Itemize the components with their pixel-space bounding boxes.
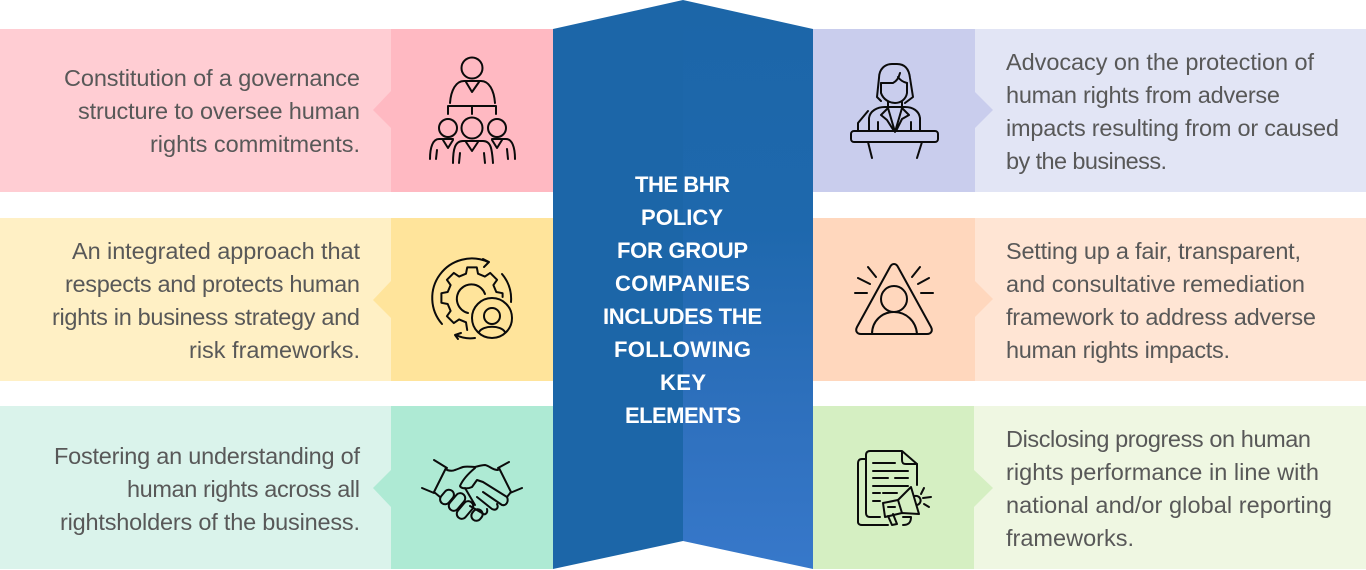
text: integrated approach: [52, 238, 360, 363]
banner heading: INCLUDES THE: [603, 304, 762, 329]
text: advocacy: human rights from adverse: [1006, 82, 1280, 108]
text: fostering understanding: Fostering an understanding of: [54, 443, 360, 469]
panel: governance structure: [0, 29, 553, 192]
banner heading: ELEMENTS: [625, 403, 741, 428]
text: advocacy: impacts resulting from or caused: [1006, 115, 1339, 141]
panel: advocacy: [813, 29, 1366, 192]
banner heading: FOR GROUP: [617, 238, 748, 263]
panel: fostering understanding: [0, 406, 553, 569]
text: remediation framework: [1006, 238, 1316, 363]
text: integrated approach: risk frameworks.: [189, 337, 360, 363]
text: integrated approach: respects and protects human: [65, 271, 360, 297]
banner heading: FOLLOWING: [614, 337, 751, 362]
icon: speaker at podium: [851, 64, 938, 158]
icon: leadership hierarchy: [430, 58, 515, 163]
text: disclosing progress: Disclosing progress on human: [1006, 426, 1311, 452]
text: disclosing progress: rights performance in line with: [1006, 459, 1319, 485]
text: integrated approach: rights in business strategy and: [52, 304, 360, 330]
text: fostering understanding: [54, 443, 360, 535]
text: remediation framework: framework to address adverse: [1006, 304, 1316, 330]
text: remediation framework: Setting up a fair, transparent,: [1006, 238, 1301, 264]
panel: integrated approach: [0, 218, 553, 381]
banner heading: THE BHR: [635, 172, 730, 197]
text: disclosing progress: national and/or global reporting: [1006, 492, 1332, 518]
text: governance structure: rights commitments.: [150, 131, 360, 157]
icon: person in warning triangle: [855, 264, 933, 334]
icon: handshake: [422, 460, 522, 523]
text: advocacy: by the business.: [1006, 148, 1167, 174]
text: governance structure: [64, 65, 360, 157]
text: disclosing progress: frameworks.: [1006, 525, 1134, 551]
text: integrated approach: An integrated approach that: [72, 238, 360, 264]
text: advocacy: [1006, 49, 1339, 174]
panel: remediation framework: [813, 218, 1366, 381]
banner heading: [603, 172, 762, 428]
text: governance structure: Constitution of a governance: [64, 65, 360, 91]
text: remediation framework: and consultative remediation: [1006, 271, 1305, 297]
text: advocacy: Advocacy on the protection of: [1006, 49, 1314, 75]
banner heading: KEY: [660, 370, 706, 395]
icon: gear with person: [432, 258, 512, 339]
text: governance structure: structure to oversee human: [78, 98, 360, 124]
text: remediation framework: human rights impacts.: [1006, 337, 1230, 363]
panel: disclosing progress: [813, 406, 1366, 569]
banner heading: POLICY: [641, 205, 723, 230]
central banner: [553, 0, 813, 569]
text: disclosing progress: [1006, 426, 1332, 551]
text: fostering understanding: rightsholders of the business.: [60, 509, 360, 535]
banner heading: COMPANIES: [615, 271, 750, 296]
icon: report with megaphone: [858, 451, 931, 525]
text: fostering understanding: human rights across all: [127, 476, 360, 502]
